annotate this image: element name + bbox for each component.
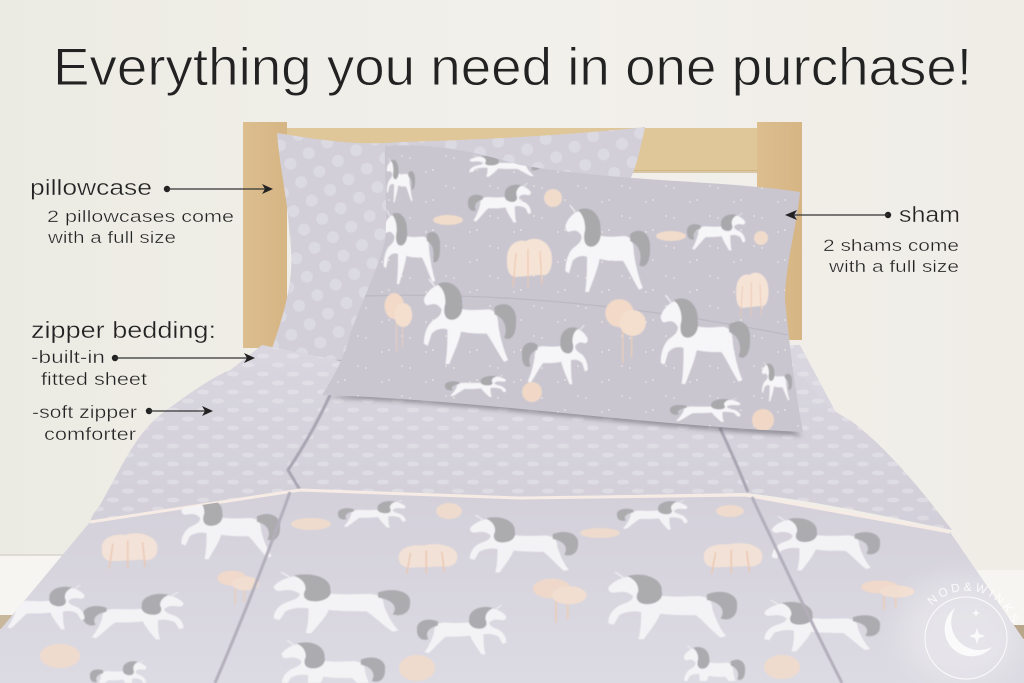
watermark logo: NOD&WINKS <box>927 582 1018 622</box>
callout: pillowcase: pillowcase <box>30 175 152 200</box>
callout: sham <box>785 202 960 276</box>
callout: zipper bedding <box>31 317 255 444</box>
callout: zipper bedding: -soft zipper <box>32 402 137 422</box>
callout: sham: 2 shams come <box>823 236 959 255</box>
callout: zipper bedding: -built-in <box>31 347 105 367</box>
callout: sham: with a full size <box>828 257 959 276</box>
back pillowcase <box>266 127 645 364</box>
title: Everything you need in one purchase! <box>53 38 972 97</box>
callout: zipper bedding: fitted sheet <box>41 369 147 389</box>
comforter unicorn print <box>0 490 1024 683</box>
headboard <box>243 122 802 348</box>
callout: zipper bedding: zipper bedding: <box>31 317 216 343</box>
callout: pillowcase: with a full size <box>47 228 176 247</box>
front sham with unicorns <box>320 140 810 440</box>
callout: zipper bedding: comforter <box>44 424 136 444</box>
callout: pillowcase <box>30 175 273 247</box>
fitted sheet <box>228 345 840 420</box>
callout: sham: sham <box>899 202 960 227</box>
callout: pillowcase: 2 pillowcases come <box>47 207 234 226</box>
watermark logo <box>924 582 1018 680</box>
folded comforter <box>90 362 952 530</box>
baseboard and floor <box>0 554 1024 639</box>
